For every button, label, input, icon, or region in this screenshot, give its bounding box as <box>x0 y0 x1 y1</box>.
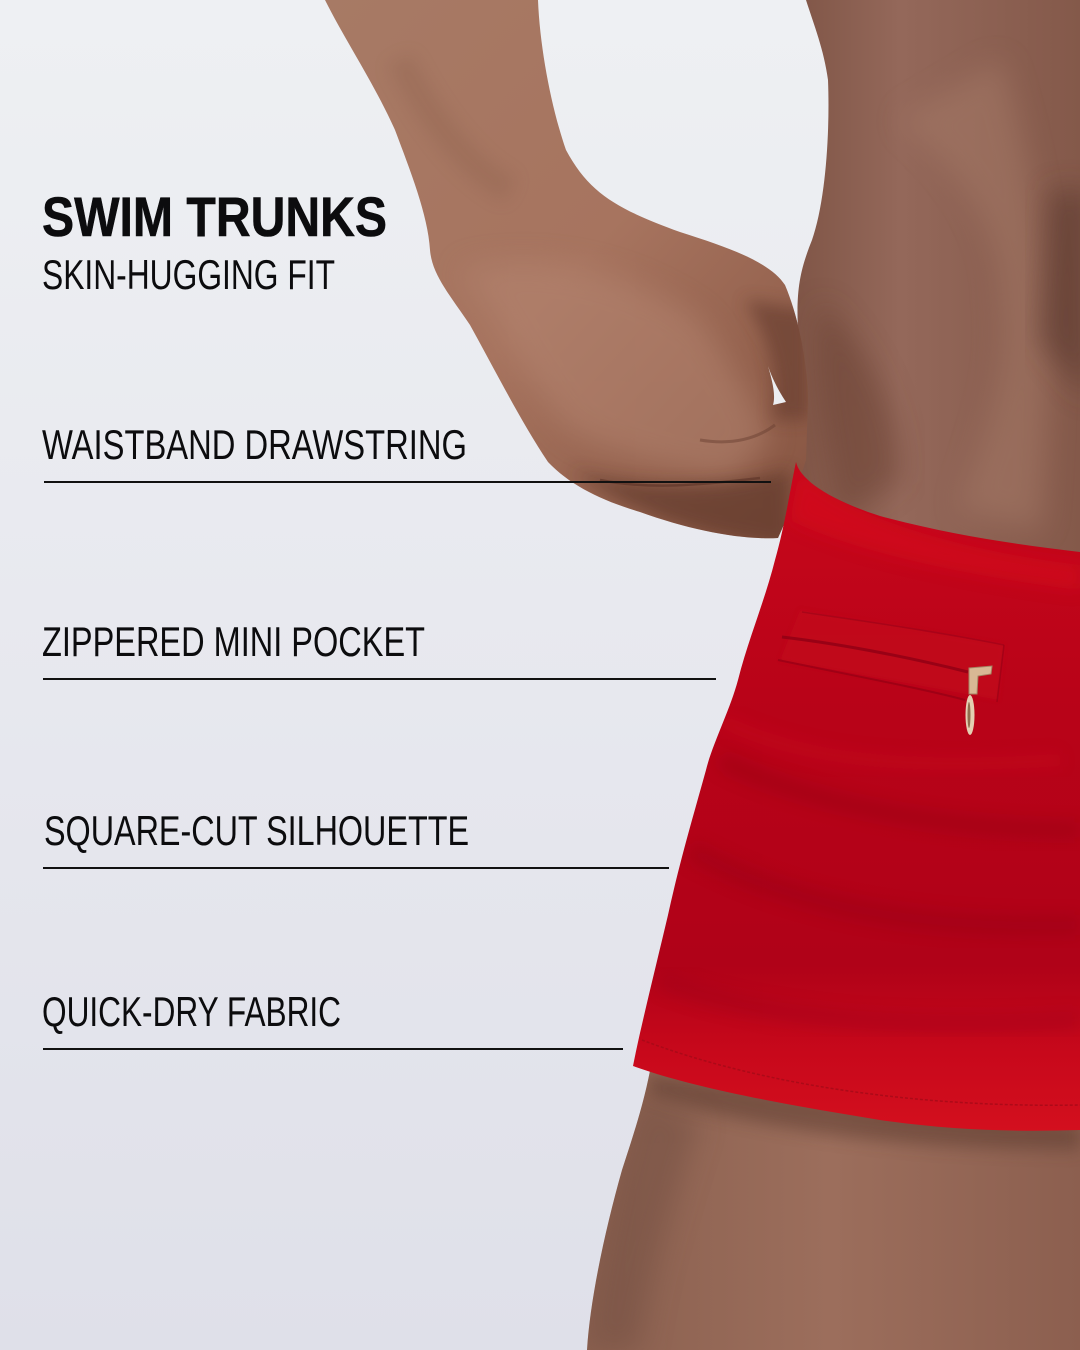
photo: red swim trunks <box>620 455 1080 1135</box>
photo: thigh <box>580 1050 1080 1350</box>
icon: zipper pull <box>966 666 992 735</box>
photo: arm and hand <box>320 0 820 545</box>
background gap between hand and torso <box>768 366 786 405</box>
photo: torso <box>798 0 1080 552</box>
finger creases <box>600 478 760 486</box>
label: quick-dry fabric: QUICK-DRY FABRIC <box>42 988 341 1035</box>
subtitle: SKIN-HUGGING FIT <box>42 251 335 298</box>
hem stitching <box>642 1040 1080 1105</box>
waistband highlight <box>800 492 1074 584</box>
fabric folds <box>720 760 1080 830</box>
zippered pocket <box>778 610 1004 735</box>
label: zippered mini pocket: ZIPPERED MINI POCKET <box>42 618 425 665</box>
title: SWIM TRUNKS <box>42 185 387 248</box>
label: waistband drawstring: WAISTBAND DRAWSTRING <box>42 421 467 468</box>
label: square-cut silhouette: SQUARE-CUT SILHOUETTE <box>44 807 469 854</box>
